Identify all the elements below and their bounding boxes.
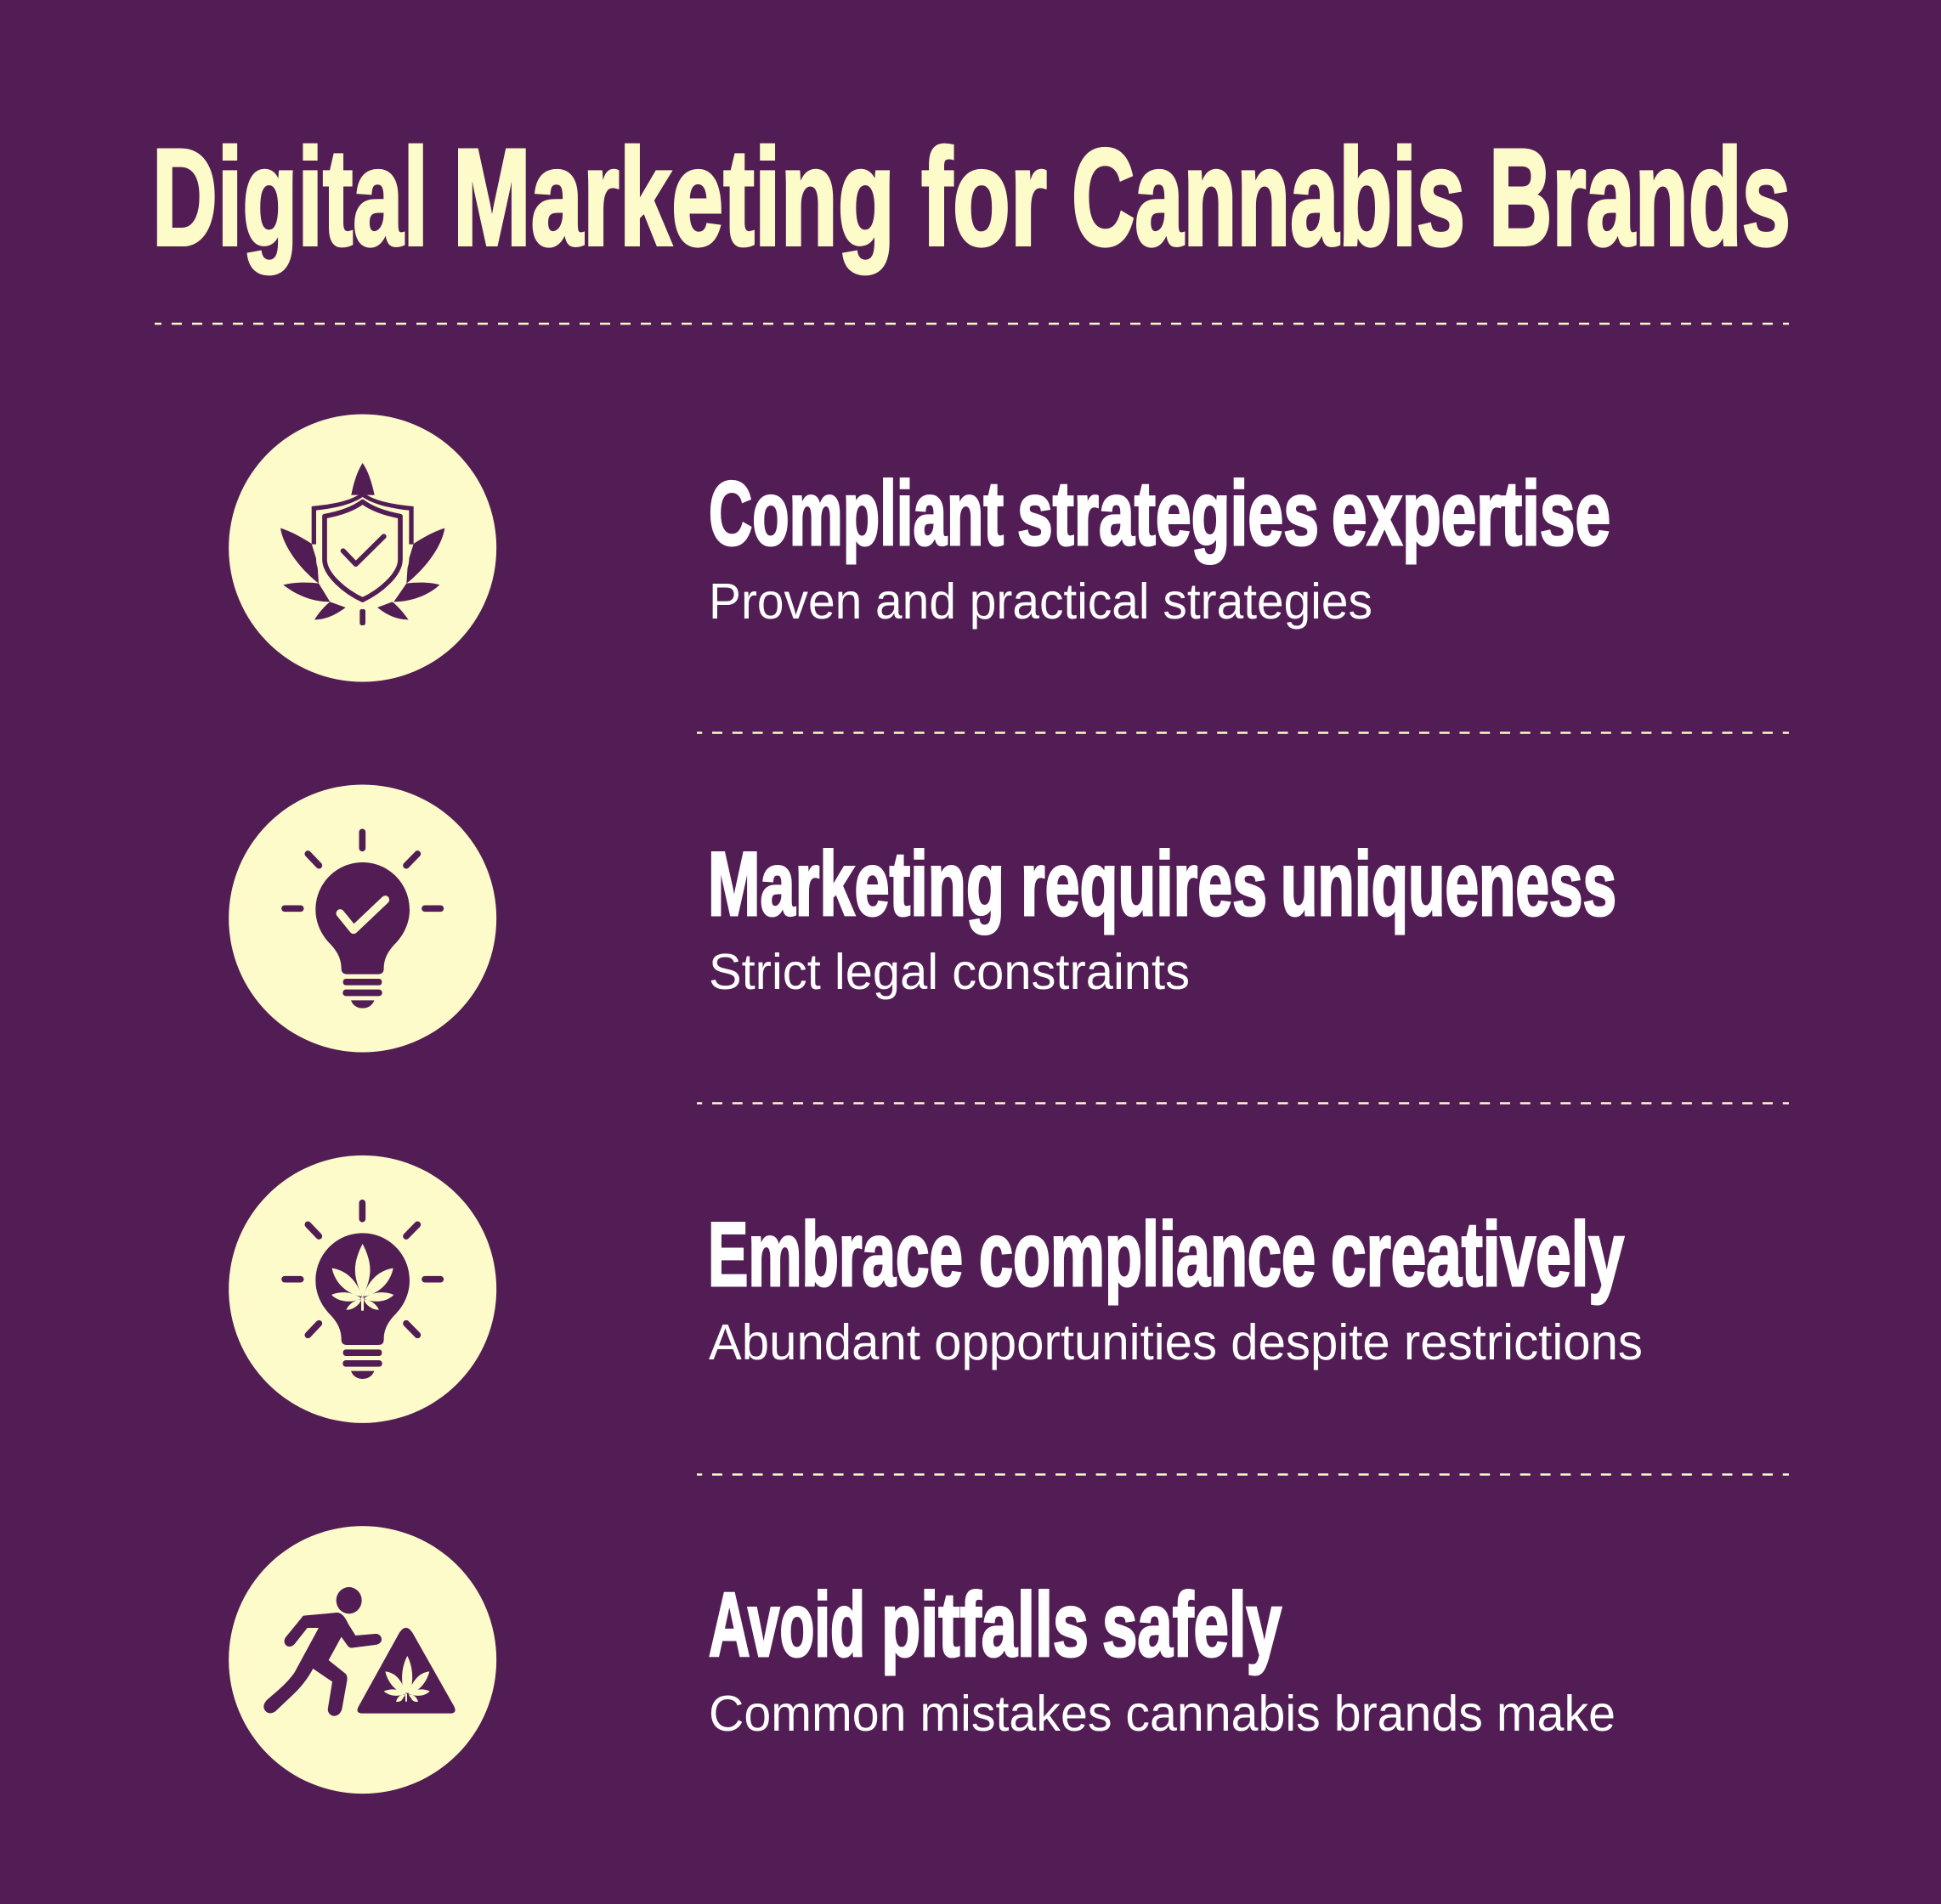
subtext: strict legal constraints: Strict legal constraints <box>709 944 1190 1000</box>
heading: avoid pitfalls safely <box>709 1573 1282 1675</box>
title: Cannabis <box>1072 121 1465 274</box>
icon: light bulb with check mark <box>229 784 496 1052</box>
panel: embrace compliance creatively <box>229 1155 1643 1423</box>
heading: marketing requires uniqueness: requires <box>1021 833 1267 935</box>
heading: embrace compliance creatively: compliance <box>979 1203 1316 1305</box>
title: for <box>921 121 1047 274</box>
heading: compliant strategies expertise: Compliant <box>709 462 1004 564</box>
icon: light bulb with cannabis leaf <box>229 1155 496 1423</box>
icon: running person and warning triangle <box>229 1526 496 1794</box>
subtext: abundant opportunities despite restrictions: Abundant opportunities despite restrictions <box>709 1314 1643 1370</box>
heading: compliant strategies expertise: strategies <box>1017 462 1319 564</box>
heading: avoid pitfalls safely: Avoid <box>709 1573 865 1675</box>
title: Digital <box>152 121 428 274</box>
title <box>152 121 1791 274</box>
panel: avoid pitfalls safely <box>229 1526 1616 1794</box>
icon: shield with cannabis leaf <box>229 414 496 681</box>
heading: embrace compliance creatively <box>708 1203 1624 1305</box>
heading: avoid pitfalls safely: pitfalls <box>881 1573 1089 1675</box>
panel: compliant strategies expertise <box>229 414 1610 681</box>
heading: compliant strategies expertise: expertise <box>1332 462 1610 564</box>
subtext: proven and practical strategies: Proven and practical strategies <box>709 573 1372 630</box>
subtext: common mistakes cannabis brands make: Common mistakes cannabis brands make <box>709 1686 1616 1742</box>
heading: embrace compliance creatively: Embrace <box>708 1203 963 1305</box>
heading: marketing requires uniqueness: uniqueness <box>1281 833 1616 935</box>
panel: marketing requires uniqueness <box>229 784 1616 1052</box>
heading: marketing requires uniqueness: Marketing <box>708 833 1004 935</box>
heading: embrace compliance creatively: creatively <box>1331 1203 1624 1305</box>
heading: compliant strategies expertise <box>709 462 1610 564</box>
heading: marketing requires uniqueness <box>708 833 1616 935</box>
title: Marketing <box>453 121 895 274</box>
heading: avoid pitfalls safely: safely <box>1102 1573 1282 1675</box>
